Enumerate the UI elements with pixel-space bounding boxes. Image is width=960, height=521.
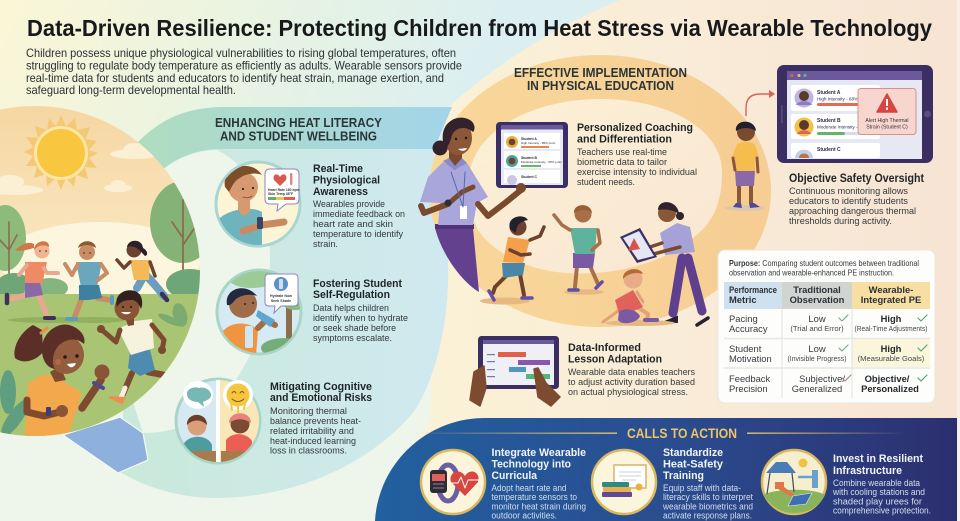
text: personalized coaching: Personalized Coaching (577, 122, 693, 134)
row: feedback precision: Objective/ (865, 373, 910, 384)
title: Data-Driven Resilience: Protecting Children from Heat Stress via Wearable Technology (27, 15, 932, 41)
panel: implementation backdrop (429, 55, 771, 327)
foliage (0, 302, 190, 440)
text: personalized coaching: biometric data to tailor (577, 157, 668, 168)
icon: large tablet dashboard (777, 65, 933, 163)
clouds (0, 143, 200, 302)
text: invest in infrastructure: Combine wearable data (833, 478, 920, 488)
text: lesson adaptation: Data-Informed (568, 342, 641, 354)
icon: resilient playground (762, 450, 826, 514)
text: self-regulation: identify when to hydrate (313, 313, 408, 324)
text: standardize training: Equip staff with data- (663, 483, 741, 493)
text: self-regulation: Fostering Student (313, 278, 402, 290)
text: objective safety oversight: Objective Safety Oversight (789, 173, 924, 185)
text: invest in infrastructure: comprehensive protection. (833, 506, 931, 516)
figure: standing child (725, 122, 765, 211)
icon: large tablet dashboard: Student A (817, 90, 841, 96)
heading: calls to action: CALLS TO ACTION (627, 426, 737, 441)
row: pacing accuracy (729, 313, 928, 334)
text: invest in infrastructure: Infrastructure (833, 465, 902, 477)
text: personalized coaching (577, 122, 697, 188)
text: cognitive risks: and Emotional Risks (270, 392, 372, 404)
text: integrate wearable technology: outdoor activities. (492, 510, 557, 520)
figure: child in teal pointing (554, 205, 604, 295)
text: standardize training: wearable biometrics and (662, 502, 753, 512)
row: student motivation: (Invisible Progress) (788, 354, 847, 363)
panel: comparison table (718, 250, 935, 403)
ground (0, 294, 198, 436)
text: self-regulation (313, 278, 408, 344)
child: girl in yellow (117, 241, 167, 300)
text: real-time awareness: temperature to identify (313, 229, 403, 240)
intro text block: safeguard long-term developmental health. (26, 83, 236, 97)
row: feedback precision: Feedback (729, 373, 770, 384)
icon: small tablet: Student C (521, 175, 538, 179)
text: objective safety oversight: thresholds during activity. (789, 216, 892, 227)
table header (724, 282, 930, 309)
heading: heat literacy: ENHANCING HEAT LITERACY (215, 116, 383, 130)
text: integrate wearable technology: Adopt heart rate and (492, 483, 566, 493)
row: feedback precision: Subjective/ (799, 373, 845, 384)
text: standardize training (662, 447, 753, 520)
table header: Observation (790, 294, 845, 305)
text: integrate wearable technology: monitor heat strain during (492, 502, 586, 512)
text: personalized coaching: Teachers use real-time (577, 147, 667, 158)
text: cognitive risks: related irritability and (270, 426, 354, 437)
text: personalized coaching: exercise intensity to individual (577, 167, 697, 178)
text: cognitive risks: heat-induced learning (270, 436, 356, 447)
text: lesson adaptation: Lesson Adaptation (568, 354, 662, 366)
text: objective safety oversight: educators to identify students (789, 196, 908, 207)
row: pacing accuracy: (Trial and Error) (790, 324, 844, 333)
icon: certificate and books (592, 450, 656, 514)
text: lesson adaptation (568, 342, 695, 398)
text: lesson adaptation: on actual physiological stress. (568, 387, 688, 398)
heading: heat literacy: AND STUDENT WELLBEING (220, 130, 377, 144)
alert box: Strain (Student C) (866, 124, 908, 130)
table header: Wearable- (869, 284, 913, 295)
row: pacing accuracy: (Real-Time Adjustments) (854, 324, 928, 333)
heading: physical education (514, 66, 687, 93)
text: real-time awareness: Awareness (313, 186, 368, 198)
text: standardize training: Training (663, 470, 704, 482)
row: pacing accuracy: Low (808, 313, 826, 324)
row: student motivation: Low (808, 343, 826, 354)
text: cognitive risks: Monitoring thermal (270, 406, 347, 417)
table header: Performance (729, 284, 777, 295)
text: invest in infrastructure (832, 453, 931, 516)
row: student motivation: Student (729, 343, 762, 354)
panel: calls to action (375, 418, 957, 521)
table header: Traditional (793, 284, 841, 295)
figure: teacher assisting with alert tablet (620, 202, 708, 325)
panel: heat literacy backdrop (63, 107, 452, 498)
intro text block: struggling to regulate body temperature as efficiently as adults. Wearable sensors provide (26, 58, 462, 72)
child: boy in white shirt (97, 290, 166, 403)
table header: Metric (729, 294, 757, 305)
purpose text: Purpose: Comparing student outcomes between traditional (729, 258, 919, 268)
text: real-time awareness (313, 163, 405, 250)
table header: Integrated PE (861, 294, 921, 305)
figure: child in orange reaching (480, 216, 544, 304)
text: cognitive risks: loss in classrooms. (270, 446, 347, 456)
text: real-time awareness: Wearables provide (313, 199, 385, 210)
text: cognitive risks: balance prevents heat- (270, 416, 361, 427)
row: student motivation (729, 343, 927, 364)
text: invest in infrastructure: with cooling stations and (832, 487, 925, 497)
text: personalized coaching: student needs. (577, 177, 635, 188)
text: standardize training: Standardize (663, 447, 723, 459)
row: pacing accuracy: Pacing (729, 313, 758, 324)
icon: boy checking wearable (216, 162, 300, 248)
text: real-time awareness: Physiological (313, 174, 380, 186)
row: student motivation: (Measurable Goals) (858, 354, 925, 363)
icon: boy checking wearable: Heart Rate 160 bpm (268, 188, 300, 192)
heading: physical education: EFFECTIVE IMPLEMENTATION (514, 66, 687, 80)
text: real-time awareness: strain. (313, 239, 338, 250)
text: lesson adaptation: to adjust activity duration based (568, 377, 695, 388)
row: pacing accuracy: Accuracy (729, 323, 768, 334)
illustration: children running in park (0, 106, 200, 436)
trees (0, 181, 216, 299)
text: real-time awareness: Real-Time (313, 163, 363, 175)
icon: small tablet: High Intensity - 85% protc (521, 141, 556, 145)
icon: small tablet: Moderate Intensity - 65% protc (521, 160, 562, 164)
text: invest in infrastructure: Invest in Resilient (833, 453, 923, 465)
text: integrate wearable technology: Curricula (492, 470, 538, 482)
icon: large tablet dashboard: High Intensity - 68% (817, 96, 858, 102)
icon: child hydrating: Seek Shade (271, 299, 291, 303)
icon: child hydrating: Hydrate Now (270, 294, 292, 298)
text: integrate wearable technology: Integrate Wearable (492, 447, 586, 459)
alert box: Alert High Thermal (865, 118, 909, 124)
text: lesson adaptation: Wearable data enables teachers (568, 367, 695, 378)
intro text block: real-time data for students and educators to identify heat strain, manage exertion, and (26, 71, 444, 85)
icon: large tablet dashboard: Moderate Intensity - (817, 124, 858, 130)
text: real-time awareness: immediate feedback on (313, 209, 405, 220)
text: objective safety oversight: Continuous monitoring allows (789, 186, 908, 197)
text: objective safety oversight: approaching dangerous thermal (789, 206, 916, 217)
text: integrate wearable technology (492, 447, 586, 520)
icon: arrow (746, 90, 775, 116)
text: cognitive risks (270, 381, 372, 456)
alert box (858, 88, 916, 134)
icon: boy checking wearable: Skin Temp 38°F (268, 192, 293, 196)
icon: child hydrating (217, 268, 309, 358)
purpose text (729, 258, 919, 278)
text: integrate wearable technology: Technology into (492, 458, 571, 470)
row: feedback precision (729, 373, 927, 394)
row: student motivation: High (881, 343, 902, 354)
heading: physical education: IN PHYSICAL EDUCATION (527, 79, 674, 93)
icon: sun (24, 115, 98, 190)
icon: smartwatch and heart (421, 450, 485, 514)
text: standardize training: literacy skills to interpret (663, 492, 753, 502)
text: self-regulation: Self-Regulation (313, 289, 390, 301)
icon: large tablet dashboard: Student C (817, 147, 841, 153)
icon: small tablet: Student A (521, 137, 537, 141)
text: self-regulation: symptoms escalate. (313, 333, 392, 344)
intro text block: Children possess unique physiological vulnerabilities to rising global temperatures, often (26, 46, 456, 60)
text: cognitive risks: Mitigating Cognitive (270, 381, 372, 393)
child: boy in blue (65, 241, 112, 319)
row: feedback precision: Precision (729, 383, 768, 394)
text: real-time awareness: heart rate and skin (313, 219, 393, 230)
text: invest in infrastructure: shaded play urees for (833, 496, 922, 506)
text: standardize training: Heat-Safety (663, 458, 724, 470)
row: feedback precision: Generalized (792, 383, 842, 394)
icon: small tablet (496, 122, 568, 193)
text: objective safety oversight (789, 173, 924, 227)
heading: heat literacy (215, 116, 383, 144)
icon: lesson schedule tablet with hands (470, 336, 560, 406)
text: self-regulation: or seek shade before (313, 323, 396, 334)
row: student motivation: Motivation (729, 353, 772, 364)
text: integrate wearable technology: temperature sensors to (492, 492, 577, 502)
icon: cognitive and emotional split (176, 378, 263, 466)
text: standardize training: activate response plans. (663, 510, 752, 520)
text: personalized coaching: and Differentiation (577, 134, 672, 146)
icon: small tablet: Student B (521, 156, 538, 160)
intro text block (26, 46, 462, 97)
row: feedback precision: Personalized (861, 383, 919, 394)
text: self-regulation: Data helps children (313, 303, 389, 314)
icon: large tablet dashboard: Student B (817, 118, 841, 124)
row: pacing accuracy: High (881, 313, 902, 324)
child: girl in coral (7, 241, 58, 318)
child: girl with ponytail in orange (14, 324, 110, 437)
figure: teacher (420, 118, 521, 292)
purpose text: observation and wearable-enhanced PE instruction. (729, 268, 894, 278)
figure: seated child (603, 269, 675, 326)
